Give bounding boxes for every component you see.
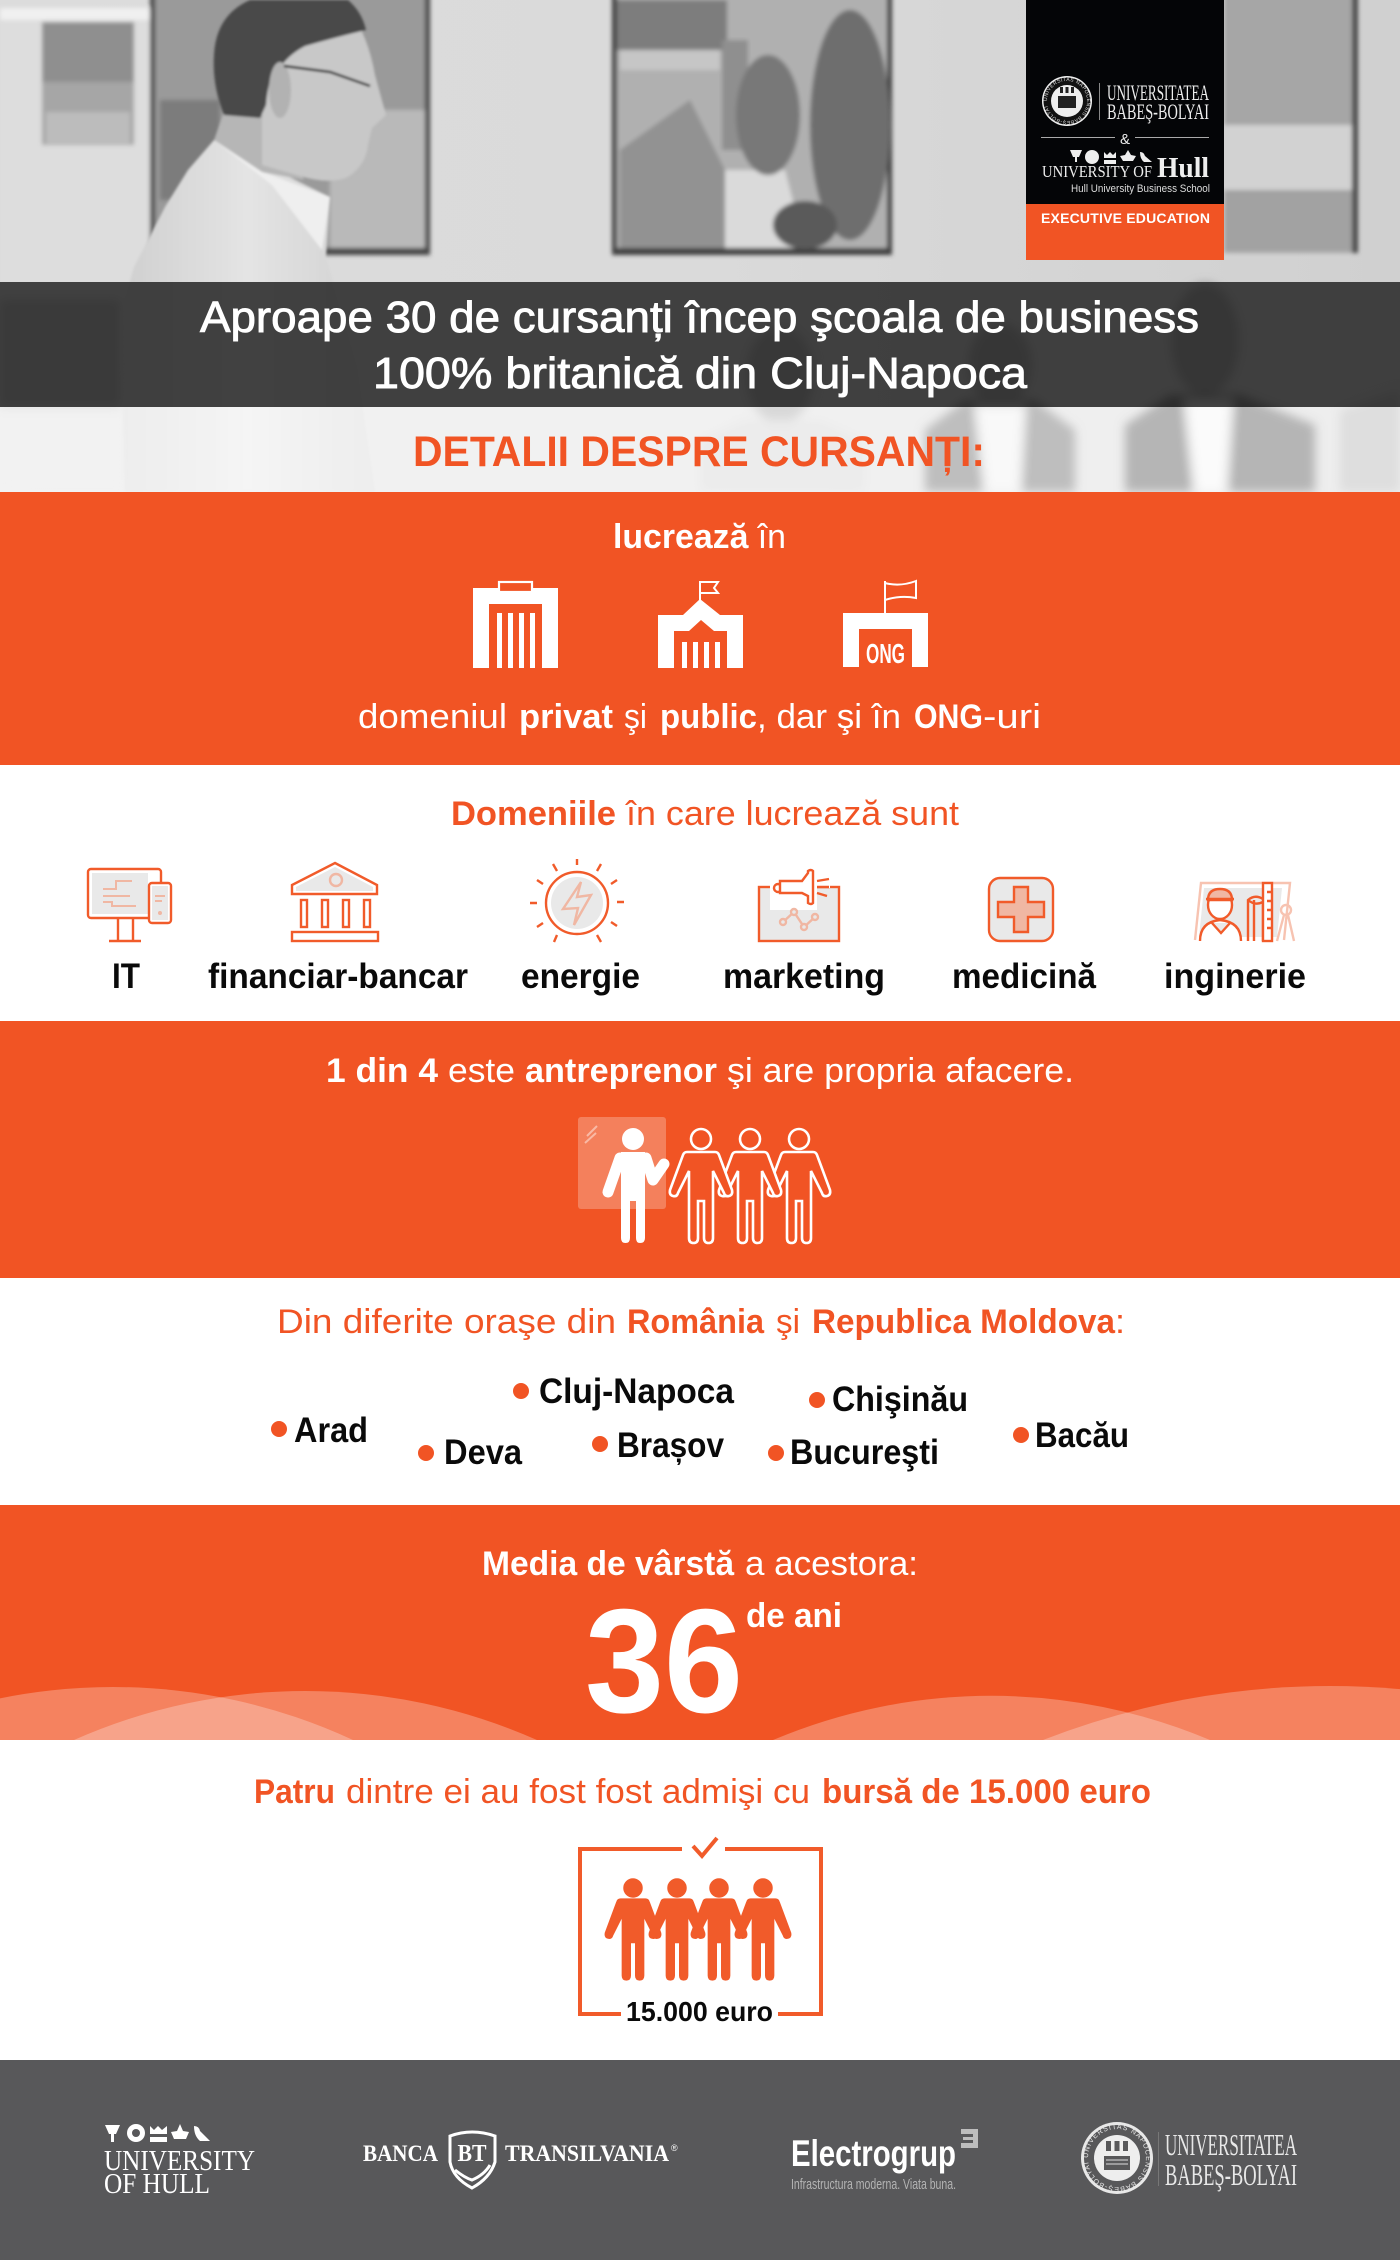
icon: marketing (759, 870, 839, 941)
icon: people (578, 1117, 830, 1243)
man (120, 0, 386, 492)
title band (0, 282, 1400, 407)
label: engineering: inginerie (1164, 957, 1306, 996)
city: București: Bucureşti (790, 1433, 939, 1472)
icon: NGO: ONG (866, 638, 905, 669)
heading (254, 1773, 1151, 1811)
ampersand: & (1120, 131, 1130, 148)
heading: dintre ei au fost fost admişi cu (346, 1773, 810, 1811)
heading: Media de vârstă (482, 1545, 735, 1583)
heading: a acestora: (745, 1545, 918, 1583)
sector text: privat (519, 698, 613, 736)
logo: University of Hull: UNIVERSITY (104, 2145, 255, 2177)
text: şi are propria afacere. (727, 1052, 1074, 1090)
label: energy: energie (521, 957, 640, 996)
logo: Babeș-Bolyai University: UNIVERSITATEA (1165, 2127, 1297, 2162)
outlined figures (670, 1129, 830, 1243)
logo: Babeș-Bolyai seal: UNIVERSITAS NAPOCENSIS BABEŞ-BOLYAI (1044, 78, 1090, 124)
heading: şi (776, 1303, 800, 1341)
icon: bank (292, 863, 378, 941)
logo: Babeș-Bolyai University (1081, 2122, 1297, 2194)
icon: IT (88, 869, 171, 941)
city: Bacău: Bacău (1035, 1416, 1129, 1455)
panel: sponsors footer (0, 2060, 1400, 2260)
heading: în care lucrează sunt (625, 795, 960, 833)
text: antreprenor (525, 1052, 717, 1090)
icon: frame with check (580, 1838, 821, 2014)
label: marketing: marketing (723, 957, 885, 996)
text: 1 din 4 (326, 1052, 438, 1090)
text (326, 1052, 1074, 1090)
panel: average age (0, 1505, 1400, 1744)
number: 36: 36 (585, 1579, 743, 1744)
logo icons: Hull (1070, 150, 1152, 164)
panel: header photo (0, 0, 1400, 492)
logo: Electrogrup (791, 2129, 978, 2193)
heading: Domeniile (451, 795, 616, 833)
logo panel: BABEŞ-BOLYAI (1107, 99, 1209, 124)
panel: sectors (0, 492, 1400, 765)
heading (451, 795, 960, 833)
logo panel: Hull (1157, 152, 1209, 184)
heading (482, 1545, 918, 1583)
sector text: -uri (983, 698, 1041, 736)
icon: energy (530, 859, 624, 942)
background students (0, 284, 1400, 492)
sector text (358, 698, 1041, 736)
heading (277, 1303, 1125, 1341)
logo text: Executive Education: EXECUTIVE EDUCATION (1041, 210, 1210, 226)
label: medicine: medicină (952, 957, 1096, 996)
sector text: , dar şi în (757, 698, 901, 736)
heading: : (1115, 1303, 1125, 1341)
panel: domains (0, 765, 1400, 1021)
logo: Babeș-Bolyai University: UNIVERSITAS NAPOCENSIS BABEŞ-BOLYAI (1084, 2125, 1150, 2191)
panel: entrepreneurs (0, 1021, 1400, 1278)
label: bank: financiar-bancar (208, 957, 468, 996)
sector text: public (660, 698, 757, 736)
heading: Republica Moldova (812, 1303, 1116, 1341)
city: Chișinău: Chişinău (832, 1380, 968, 1419)
heading: România (627, 1303, 765, 1341)
heading: Din diferite oraşe din (277, 1303, 616, 1341)
title line 2: 100% britanică din Cluj-Napoca (373, 349, 1028, 398)
subtitle: DETALII DESPRE CURSANȚI: (413, 428, 985, 476)
city: Cluj-Napoca: Cluj-Napoca (539, 1372, 734, 1411)
logo: Banca Transilvania: BANCA (363, 2141, 438, 2166)
presenter figure (608, 1128, 664, 1243)
icon: private building (473, 582, 558, 668)
icon: engineering (1195, 883, 1294, 941)
logo: Banca Transilvania (363, 2132, 678, 2188)
sector text: ONG (914, 698, 983, 736)
amount label: 15.000 euro (626, 1996, 773, 2027)
city: Deva: Deva (444, 1433, 522, 1472)
logo: Babeș-Bolyai University: BABEŞ-BOLYAI (1165, 2157, 1297, 2192)
logo: Banca Transilvania: ® (671, 2143, 678, 2153)
icon: NGO (843, 581, 928, 669)
logo: Banca Transilvania: TRANSILVANIA (505, 2141, 669, 2166)
panel: scholarships (0, 1740, 1400, 2060)
logo panel: Hull University Business School (1071, 183, 1210, 195)
heading: Patru (254, 1773, 335, 1811)
logo: Electrogrup: Electrogrup (791, 2133, 956, 2174)
city: Brașov: Brașov (617, 1426, 724, 1465)
city: Arad: Arad (294, 1411, 368, 1450)
unit: de ani (746, 1597, 842, 1635)
logo: Banca Transilvania: BT (458, 2141, 486, 2167)
logo: University of Hull: OF HULL (104, 2168, 210, 2200)
panel: cities (0, 1278, 1400, 1505)
subtitle band (0, 407, 1400, 492)
logo text: Babeș-Bolyai: UNIVERSITATEA (1107, 80, 1209, 105)
logo: Electrogrup: Infrastructura moderna. Viata buna. (791, 2176, 956, 2193)
icon: public institution (658, 582, 743, 668)
text: este (448, 1052, 515, 1090)
sector text: domeniul (358, 698, 507, 736)
waves (0, 1686, 1400, 1740)
icon: medicine (989, 878, 1053, 941)
heading: lucrează în (613, 518, 786, 556)
logo: University of Hull (104, 2124, 255, 2200)
icon: four people (605, 1879, 791, 1980)
logo text: University of Hull: UNIVERSITY OF (1042, 162, 1152, 181)
label: IT: IT (112, 957, 140, 996)
sector text: şi (624, 698, 647, 736)
logo panel (1026, 0, 1224, 260)
heading: bursă de 15.000 euro (822, 1773, 1151, 1811)
title line 1: Aproape 30 de cursanți încep şcoala de business (200, 293, 1199, 342)
